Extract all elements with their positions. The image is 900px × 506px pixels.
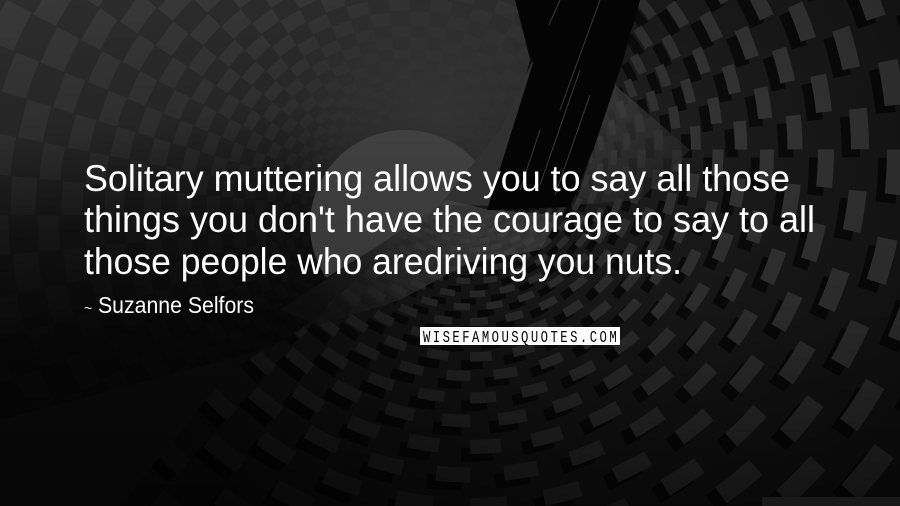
quote text: those people who aredriving you nuts. [84, 241, 682, 282]
lit lower band under the opening [316, 200, 560, 314]
quote text: things you don't have the courage to say to all [84, 199, 815, 240]
watermark stamp: WISEFAMOUSQUOTES.COM [423, 329, 617, 348]
tunnel opening disc [310, 130, 475, 278]
right wall: dark blocks with lit slivers [254, 0, 900, 506]
black central wedge with light streaks [487, 0, 640, 210]
attribution: ~ Suzanne Selfors [84, 292, 254, 318]
quote text: Solitary muttering allows you to say all those [84, 158, 790, 199]
faint strip, bottom right [762, 497, 900, 506]
quote text [84, 158, 815, 282]
bottom shading [396, 412, 894, 506]
tiled vault, upper left [0, 0, 530, 264]
lit stepped wall near the centre [575, 85, 690, 205]
grey ledge beside the opening [440, 60, 537, 210]
